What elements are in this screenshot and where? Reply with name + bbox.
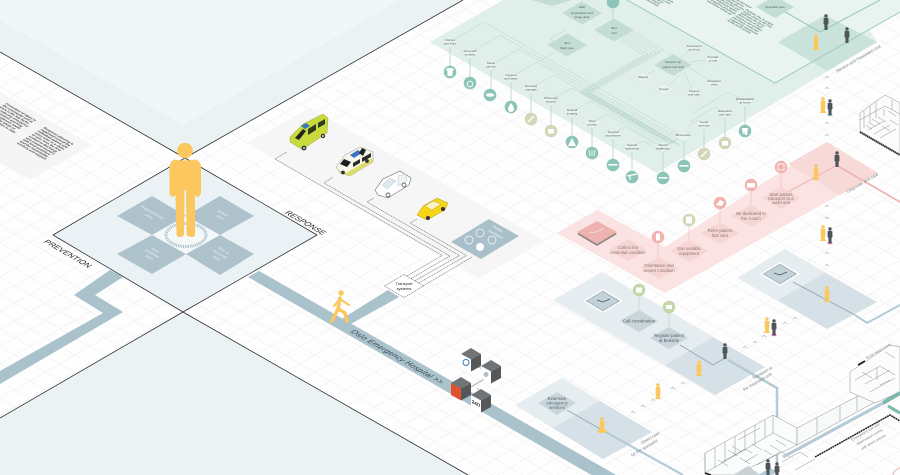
service labels: Mental — [658, 143, 668, 147]
service labels: and water — [504, 76, 518, 80]
text block: left notes: contact to discharge — [27, 135, 59, 153]
pink plane steps: fast care — [712, 233, 729, 238]
route captions: blue: the treatment unit — [742, 371, 773, 392]
green plane decision tiles: Bed — [611, 26, 617, 30]
panel: central diamond — [53, 158, 317, 312]
blue plane steps: at Bedside — [659, 338, 680, 343]
pink plane steps: ward unit — [772, 200, 791, 205]
callout: transport systems: Transport — [396, 281, 413, 286]
callout: transport systems — [384, 274, 424, 298]
service labels: Clothes — [445, 38, 456, 42]
panel: four action tiles: analysis — [144, 248, 161, 258]
people: pink plane — [812, 151, 840, 180]
service labels: procedures — [605, 134, 621, 138]
path: main response route — [248, 271, 625, 475]
text block: left notes: Prevention of injury in — [4, 102, 38, 122]
panel: green services plane — [430, 0, 900, 173]
service labels: support — [546, 100, 556, 104]
text block: left notes: of care, from the first — [30, 133, 63, 152]
green plane decision tiles: Medical unit — [665, 60, 681, 64]
panel: blue arrival plane — [515, 378, 652, 459]
service labels: services — [698, 124, 710, 128]
panel: four action tiles: plan — [144, 254, 155, 261]
text block: left notes: services and support — [16, 142, 48, 161]
service labels: healthcare — [656, 146, 670, 150]
service labels: at home — [740, 100, 751, 104]
service labels: Medical — [567, 108, 577, 112]
service labels: nutrition — [465, 52, 476, 56]
panel: four action tiles: Risk & — [216, 246, 231, 255]
text block: left notes: with local providers — [21, 138, 52, 156]
text block: green notes: recovery and comfort — [734, 14, 764, 32]
service labels: and care — [688, 92, 700, 96]
icon: walking person — [332, 290, 349, 321]
route captions: blue: Transport to — [751, 365, 774, 380]
text block: green notes: supporting equipment — [729, 17, 759, 35]
building: lower right emergency department: with direct access — [860, 433, 887, 451]
blue plane stems — [639, 296, 669, 329]
service labels: Social — [700, 120, 708, 124]
service labels: Dialysis — [638, 75, 649, 79]
service labels: Blood tests — [676, 133, 691, 137]
waiting markers — [820, 76, 832, 136]
text block: green notes — [644, 0, 776, 37]
dashed connectors to vehicles — [275, 152, 472, 286]
path: branch to transport systems — [340, 290, 399, 325]
panel: four action tiles: plan — [215, 214, 226, 221]
service labels: rounds — [587, 122, 597, 126]
route caption: pink: Diagnosis and care — [845, 171, 880, 194]
text block: left notes: Response planning is — [42, 126, 75, 146]
service labels: Surgery — [689, 89, 700, 93]
service labels: Ward — [588, 119, 596, 123]
pink plane circles — [652, 161, 787, 243]
green plane decision tiles: Specialist care — [765, 5, 785, 9]
panel: vehicles band — [247, 108, 543, 278]
panel: public transport tile: transport — [487, 229, 506, 240]
service labels: Meals — [487, 61, 495, 65]
panel: blue observation plane — [737, 249, 877, 329]
text block: green notes: staff base for direct — [739, 11, 766, 27]
panel: public transport tile — [451, 219, 519, 259]
text block: left notes: every actor in a chain — [33, 132, 66, 150]
service labels: treatments — [625, 146, 640, 150]
icons: service cubes: 24/7 — [472, 399, 481, 410]
pink plane steps: equipment — [679, 251, 700, 256]
pink plane stems — [658, 173, 781, 262]
panel: four action tiles: resource — [211, 249, 230, 260]
service labels: visits — [711, 82, 718, 86]
blue plane steps: Call coordination — [623, 318, 656, 324]
service labels: and care — [719, 112, 731, 116]
service labels: to unit — [709, 58, 717, 62]
label: response: RESPONSE — [282, 209, 328, 236]
icon: ambulance — [290, 114, 328, 150]
pink plane steps: essential condition — [610, 250, 646, 255]
text block: left notes: and onward recovery — [24, 137, 57, 155]
text block: green notes: at the point of care — [726, 19, 753, 35]
panel: public transport tile: Public — [491, 225, 505, 233]
service labels: and linen — [444, 42, 456, 46]
text block: left notes — [0, 92, 92, 180]
service icon circles — [444, 0, 751, 184]
text block: green notes: and family visits and — [731, 16, 760, 33]
service labels: service — [486, 64, 496, 68]
service labels: Hygiene — [505, 73, 517, 77]
blue plane circles — [633, 284, 675, 313]
green plane decision tiles: Bed — [564, 41, 570, 45]
text block: green notes: Patients stay in single — [744, 8, 775, 26]
route caption: green: Service and Treatment Unit — [835, 43, 882, 74]
icon: central person — [170, 143, 201, 237]
building: upper right ward — [860, 95, 900, 155]
text block: left notes: individual patient and — [36, 130, 69, 149]
panel: four action tiles — [117, 196, 254, 275]
label: prevention: PREVENTION — [41, 238, 94, 269]
pink plane routes — [788, 165, 900, 202]
pink plane steps: Orientation and — [644, 263, 674, 268]
building: lower right emergency department — [705, 342, 900, 475]
pink plane steps: Be dedicated in — [736, 211, 766, 216]
text block: green notes: observation of their — [736, 13, 765, 29]
service labels: Surgical — [608, 130, 619, 134]
building: lower right emergency department: Acute ward rooms — [865, 342, 892, 360]
blue plane steps: Register patient — [654, 333, 685, 338]
green plane circuit lines — [450, 22, 745, 147]
pink plane steps: Collect the — [618, 245, 639, 250]
callout: transport systems: systems — [397, 286, 411, 291]
text block: left notes: and the municipality — [19, 140, 50, 158]
route captions: blue: by the specialist — [630, 438, 659, 457]
panel: four action tiles: Action — [216, 209, 231, 218]
label: road sign: Oslo Emergency Hospital >> — [348, 328, 447, 385]
service labels: Outpatient — [707, 79, 721, 83]
service labels: Rehabilitation — [736, 97, 754, 101]
pink plane steps: the Coach — [741, 216, 761, 221]
route captions: blue — [630, 365, 774, 457]
text block: green notes: rooms close to the unit — [742, 10, 773, 28]
panel: lower pale quadrant — [0, 312, 470, 475]
service labels: imaging — [567, 112, 578, 116]
icon: police car — [336, 147, 373, 176]
blue plane steps: services — [549, 405, 565, 410]
green plane routes — [627, 0, 900, 83]
blue plane steps: Extensive — [548, 396, 567, 401]
path: prevention route — [0, 270, 123, 384]
panel: four action tiles: Preparedness — [139, 204, 166, 220]
service labels: Education — [718, 109, 732, 113]
green plane decision tiles — [532, 0, 794, 76]
icons: service cubes — [451, 348, 501, 412]
pink plane steps: transport to a — [768, 196, 794, 201]
blue plane steps — [538, 310, 688, 415]
route captions: blue: Direct care — [640, 430, 661, 445]
pink plane steps — [609, 187, 800, 279]
green plane decision tiles: patient and staff — [662, 65, 684, 69]
icons: clock tiles — [583, 262, 800, 313]
service labels: Ambulance — [686, 44, 702, 48]
pink plane steps: Start patient — [769, 192, 793, 197]
service labels: Dressing — [525, 84, 537, 88]
green plane decision tiles: AED — [579, 5, 586, 9]
green plane decision tiles: Unit — [611, 31, 617, 35]
icon: taxi — [417, 198, 448, 220]
waiting markers: lower — [820, 205, 832, 266]
icon: unmarked car — [375, 171, 411, 198]
green plane decision tiles: Ward care — [560, 46, 574, 50]
panel: four action tiles: Risk — [150, 247, 162, 254]
service labels: and bed — [689, 48, 700, 52]
building: lower right emergency department: observation rooms — [856, 428, 883, 446]
green plane decision tiles: Registration and — [571, 11, 593, 15]
pink plane steps: Use suitable — [677, 246, 701, 251]
blue plane steps: emergency — [546, 400, 568, 406]
people: blue planes — [597, 286, 830, 433]
service labels: Oxygen — [659, 87, 669, 91]
blue plane routes — [567, 282, 900, 475]
text block: left notes: organised around the — [39, 128, 72, 147]
service labels: Pharmacy — [544, 96, 558, 100]
panel: blue registration plane — [553, 272, 765, 395]
service labels: changes — [525, 88, 537, 92]
people: green plane — [812, 14, 850, 50]
green plane decision tiles: triage desk — [575, 15, 590, 19]
service labels: Transfer — [707, 55, 719, 59]
axis lines — [0, 0, 468, 475]
icon: pink monitor tile — [577, 221, 617, 246]
panel: four action tiles: plan — [144, 213, 155, 220]
service labels: Special — [627, 143, 637, 147]
green plane stems — [450, 8, 745, 173]
pink plane steps: Refer patient — [708, 228, 733, 233]
pink plane steps: secure condition — [643, 268, 675, 273]
service labels: Food and — [464, 49, 477, 53]
panel: upper pale quadrant — [0, 0, 463, 158]
panel: pink diagnosis plane — [557, 142, 878, 293]
panel: four action tiles: plan — [212, 255, 223, 262]
service labels — [441, 36, 754, 152]
text block: left notes: the community and at — [1, 104, 35, 124]
building: lower right emergency department: Emergency unit and — [851, 422, 880, 442]
waiting people: standalone — [631, 317, 797, 413]
